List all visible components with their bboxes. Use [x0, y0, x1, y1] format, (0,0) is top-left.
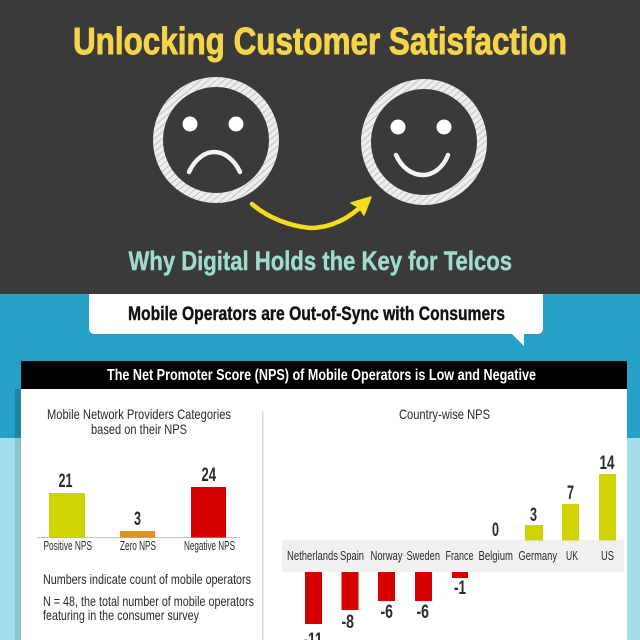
bar chart: country-wise NPS: Netherlands: [287, 548, 338, 563]
icon: sad face: [158, 82, 274, 198]
bar chart: categories: Positive NPS: [44, 538, 92, 553]
subtitle: Why Digital Holds the Key for Telcos: [128, 246, 512, 276]
heading: categories chart: Mobile Network Providers Categories: [47, 406, 231, 422]
panel heading: [21, 361, 627, 389]
bar chart: country-wise NPS: Belgium: [478, 548, 513, 563]
bar chart: categories: 21: [58, 471, 73, 492]
text: chart notes: [43, 571, 254, 623]
bar chart: country-wise NPS: -6: [380, 602, 393, 623]
panel left shadow: [15, 389, 21, 640]
heading: categories chart: [47, 406, 231, 437]
text: chart notes: N = 48, the total number of mobile operators: [43, 593, 254, 609]
bar chart: country-wise NPS: -1: [454, 578, 466, 599]
bar chart: country-wise NPS: [282, 453, 624, 640]
bar chart: country-wise NPS: Norway: [370, 548, 403, 563]
bar chart: categories: 3: [134, 509, 141, 530]
bar chart: country-wise NPS: Germany: [518, 548, 557, 563]
bar chart: country-wise NPS: 7: [567, 483, 574, 504]
bar chart: categories: Negative NPS: [184, 538, 235, 553]
callout: Mobile Operators are Out-of-Sync with Consumers: [128, 303, 505, 325]
bar chart: country-wise NPS: -6: [416, 602, 429, 623]
heading: categories chart: based on their NPS: [91, 421, 187, 437]
light blue background band: [0, 438, 640, 640]
bar chart: country-wise NPS: -8: [342, 612, 354, 633]
bar chart: country-wise NPS: 3: [530, 505, 537, 526]
blue background band: [0, 294, 640, 438]
bar chart: categories: 24: [202, 465, 216, 486]
icon: happy face: [366, 84, 482, 200]
bar chart: country-wise NPS: US: [601, 548, 614, 563]
bar chart: country-wise NPS: Spain: [340, 548, 364, 563]
bar chart: country-wise NPS: 0: [492, 520, 499, 541]
bar chart: country-wise NPS: UK: [566, 548, 578, 563]
panel heading: The Net Promoter Score (NPS) of Mobile Operators is Low and Negative: [107, 367, 536, 384]
callout: [89, 294, 543, 346]
bar chart: categories: [37, 465, 240, 553]
arrow: sad to happy: [252, 197, 371, 228]
bar chart: country-wise NPS: 14: [600, 453, 615, 474]
bar chart: country-wise NPS: Sweden: [406, 548, 440, 563]
bar chart: country-wise NPS: France: [446, 548, 474, 563]
text: chart notes: featuring in the consumer survey: [43, 607, 199, 623]
text: chart notes: Numbers indicate count of mobile operators: [43, 571, 251, 587]
bar chart: categories: Zero NPS: [120, 538, 156, 553]
header background: [0, 0, 640, 294]
panel: net promoter score: [21, 361, 627, 640]
heading: country chart: Country-wise NPS: [399, 406, 490, 422]
